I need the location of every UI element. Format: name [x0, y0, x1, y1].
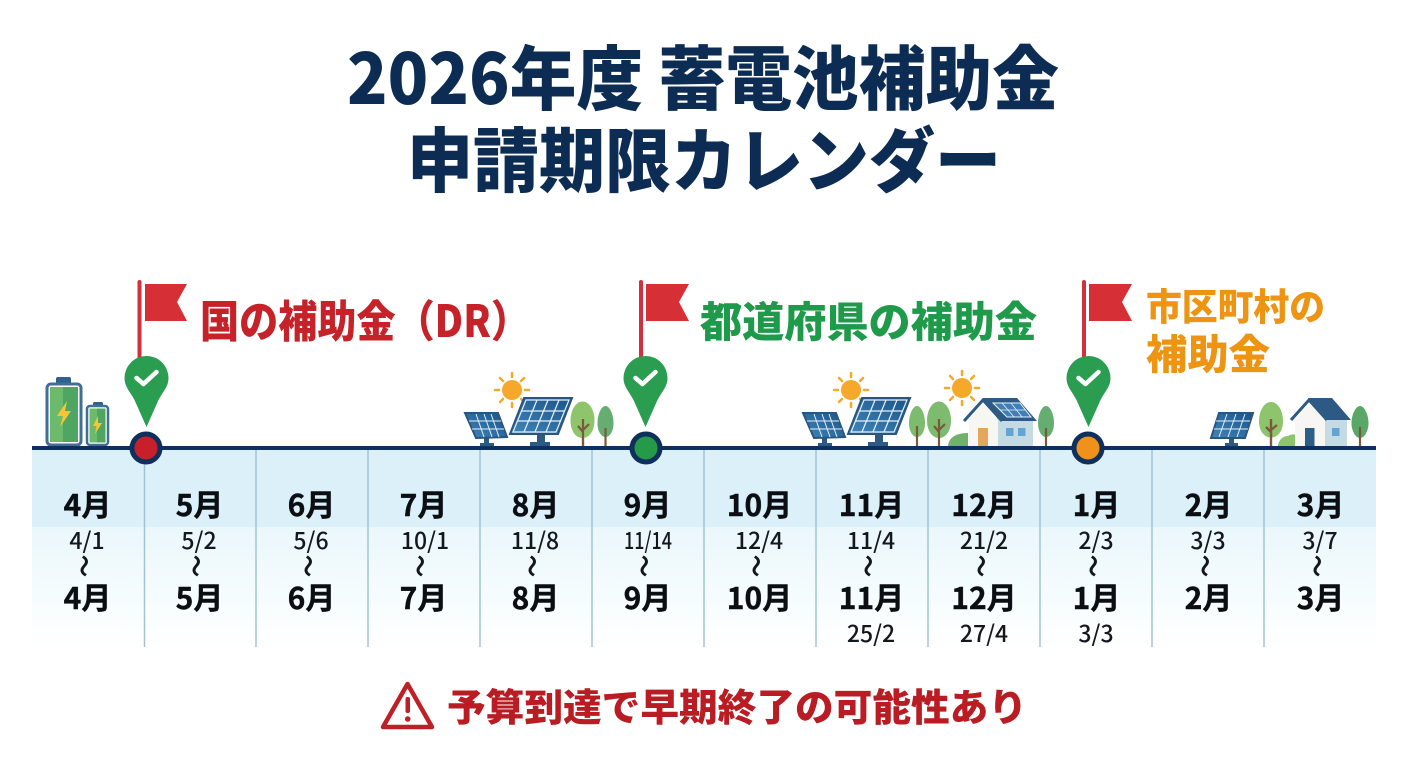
icon: house with rooftop solar [948, 398, 1037, 447]
column: December: 21/2 [960, 522, 1008, 556]
column: July [391, 481, 455, 618]
column: October: 10月 [727, 481, 792, 525]
column: November: 11月 [839, 574, 904, 618]
column: July: ~ [391, 554, 455, 578]
column: June: 6月 [288, 574, 335, 618]
icon: tree [1352, 406, 1368, 447]
title: 申請期限カレンダー [407, 106, 1001, 207]
column: May: ~ [167, 554, 231, 578]
timeline axis [32, 446, 1376, 450]
icon: solar panel, tree and house (February-March) [1211, 398, 1368, 447]
column: June [279, 481, 343, 618]
column: May: 5/2 [181, 522, 217, 556]
icon: green pin [1066, 356, 1110, 427]
column: February: 2月 [1185, 574, 1232, 618]
label: municipal subsidy: 市区町村の [1146, 277, 1325, 331]
column: August: 11/8 [511, 522, 559, 556]
timeline node [132, 434, 160, 462]
icon: warning triangle [383, 684, 432, 727]
warning callout [383, 677, 1027, 732]
column: August: 8月 [512, 481, 559, 525]
column: October: ~ [727, 554, 791, 578]
column: December: ~ [952, 554, 1016, 578]
icon: trees [570, 402, 614, 447]
icon: red flag [1082, 280, 1132, 360]
title: 2026年度 蓄電池補助金 [347, 24, 1059, 125]
column: September [615, 481, 679, 618]
column: August [503, 481, 567, 618]
column: December [951, 481, 1017, 649]
icon: red flag [138, 280, 187, 360]
column: October: 12/4 [735, 522, 783, 556]
column: June: ~ [279, 554, 343, 578]
column: December: 12月 [951, 574, 1017, 618]
column: September: 9月 [624, 574, 671, 618]
icon: solar panels, trees and house (November-December) [803, 371, 1054, 447]
icon: small solar panel [465, 413, 507, 447]
icon: solar panels and trees (August) [465, 373, 614, 447]
column: April: 4月 [64, 481, 111, 525]
title [347, 24, 1059, 207]
warning text: 予算到達で早期終了の可能性あり [447, 677, 1027, 732]
column: March: ~ [1288, 554, 1352, 578]
icon: red flag [639, 280, 689, 360]
column: December: 12月 [951, 481, 1017, 525]
column: March: 3月 [1297, 574, 1344, 618]
column: June: 5/6 [293, 522, 329, 556]
column: July: 10/1 [401, 522, 449, 556]
column: July: 7月 [400, 574, 447, 618]
marker: national subsidy [124, 280, 187, 462]
column: November: ~ [839, 554, 903, 578]
icon: solar panel [1211, 413, 1253, 447]
column: June: 6月 [288, 481, 335, 525]
timeline node [632, 434, 660, 462]
column: January: 1月 [1073, 574, 1120, 618]
column: August: 8月 [512, 574, 559, 618]
column: February: 3/3 [1190, 522, 1226, 556]
column: May [167, 481, 231, 618]
column: January: ~ [1064, 554, 1128, 578]
column: February: ~ [1176, 554, 1240, 578]
label: municipal subsidy [1146, 277, 1325, 381]
icon: green pin [624, 356, 668, 427]
column: March: 3月 [1297, 481, 1344, 525]
column: April: ~ [55, 554, 119, 578]
icon: small solar panel [803, 413, 845, 447]
column: November: 11/4 [847, 522, 895, 556]
column: August: ~ [503, 554, 567, 578]
icon: house [1278, 398, 1351, 447]
icon: tree [1038, 406, 1054, 447]
column: January: 3/3 [1078, 615, 1114, 649]
column: May: 5月 [176, 574, 223, 618]
column: April [55, 481, 119, 618]
column: November [839, 481, 904, 649]
icon: trees [909, 402, 951, 447]
column: February [1176, 481, 1240, 618]
icon: sun [834, 373, 868, 407]
column: May: 5月 [176, 481, 223, 525]
column: January: 2/3 [1078, 522, 1114, 556]
label: municipal subsidy: 補助金 [1146, 321, 1270, 381]
column: October [727, 481, 792, 618]
column: July: 7月 [400, 481, 447, 525]
label: prefecture subsidy: 都道府県の補助金 [700, 289, 1037, 350]
column: February: 2月 [1185, 481, 1232, 525]
column: September: 11/14 [624, 522, 672, 556]
icon: large solar panel [510, 398, 572, 447]
icon: sun [945, 371, 979, 405]
calendar table background [32, 450, 1376, 649]
icon: sun [495, 373, 529, 407]
icon: batteries [47, 377, 108, 445]
label: national subsidy: 国の補助金（DR） [200, 286, 530, 350]
column: November: 25/2 [847, 615, 895, 649]
column: January: 1月 [1073, 481, 1120, 525]
column: April: 4月 [64, 574, 111, 618]
column: April: 4/1 [69, 522, 105, 556]
marker: prefecture subsidy [624, 280, 689, 462]
column: September: ~ [615, 554, 679, 578]
column: January [1064, 481, 1128, 649]
column: November: 11月 [839, 481, 904, 525]
column: March: 3/7 [1302, 522, 1338, 556]
icon: green pin [124, 356, 168, 427]
timeline node [1074, 434, 1102, 462]
icon: tree [1259, 402, 1283, 447]
marker: municipal subsidy [1066, 280, 1132, 462]
column: March [1288, 481, 1352, 618]
column: October: 10月 [727, 574, 792, 618]
column: December: 27/4 [960, 615, 1008, 649]
column: September: 9月 [624, 481, 671, 525]
icon: large solar panel [848, 398, 910, 447]
